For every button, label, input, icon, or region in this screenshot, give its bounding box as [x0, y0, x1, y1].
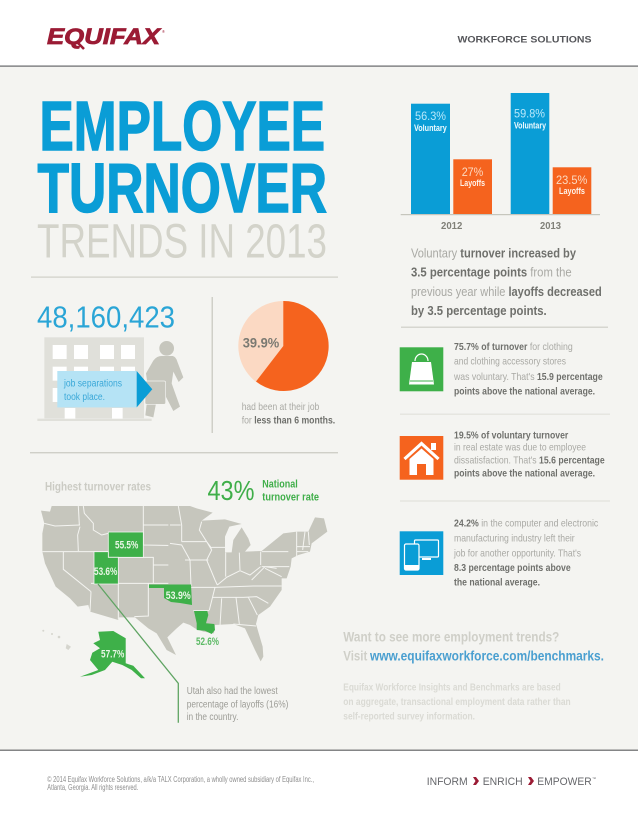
icon: person walking with briefcase — [145, 341, 183, 417]
call to action: Want to see more employment trends? — [343, 629, 559, 645]
state: Wyoming — [108, 532, 143, 557]
methodology note: self-reported survey information. — [343, 711, 475, 722]
header: Equifax logo: EQUIFAX — [47, 24, 162, 49]
callout: job separations took place: took place. — [64, 392, 105, 403]
footer: tagline: ENRICH — [483, 776, 523, 788]
footer: copyright — [47, 775, 314, 792]
map: highest turnover rates by US state — [41, 506, 327, 723]
bar chart: voluntary vs layoffs — [401, 93, 600, 232]
national turnover rate — [208, 475, 319, 506]
item: clothing stores — [400, 341, 603, 398]
methodology note: on aggregate, transactional employment data rather than — [343, 697, 571, 708]
national turnover rate: turnover rate — [262, 492, 319, 504]
text: computer manufacturing: job for another opportunity. That's — [453, 548, 581, 560]
text: real estate — [454, 429, 605, 480]
state labels: 55.5% — [115, 539, 138, 551]
callout text: Utah — [187, 686, 288, 723]
national turnover rate: National — [262, 478, 298, 490]
footer: tagline: INFORM — [427, 776, 468, 788]
callout text: Utah: Utah also had the lowest — [187, 686, 278, 697]
bar chart: voluntary vs layoffs: Voluntary — [414, 123, 447, 134]
callout line: Utah — [98, 584, 178, 723]
state: Alaska — [80, 631, 145, 678]
heading: highest turnover rates: Highest turnover rates — [45, 480, 151, 494]
pie caption: for less than 6 months. — [242, 414, 335, 426]
state labels: 53.9% — [166, 590, 191, 602]
callout text: Utah: percentage of layoffs (16%) — [187, 699, 288, 710]
text: computer manufacturing: the national average. — [454, 577, 540, 589]
pie chart: less than 6 months: 39.9% — [243, 335, 280, 351]
pie caption: had been at their job — [242, 401, 319, 413]
callout: job separations took place: job separations — [63, 379, 122, 390]
text: real estate: dissatisfaction. That's 15.6 percentage — [454, 454, 605, 466]
item: real estate — [400, 429, 605, 480]
bar chart: voluntary vs layoffs: Layoffs — [559, 186, 585, 197]
state labels — [94, 539, 219, 661]
text: clothing stores: was voluntary. That's 15.9 percentage — [453, 371, 603, 383]
bar chart: voluntary vs layoffs: 27% — [462, 165, 484, 179]
bar chart: voluntary vs layoffs: Layoffs — [460, 178, 485, 189]
text: chart summary: previous year while layoffs decreased — [411, 285, 602, 299]
map: western states — [41, 506, 177, 655]
title: EMPLOYEE — [40, 87, 325, 165]
state: Louisiana — [194, 611, 215, 634]
call to action — [343, 629, 604, 664]
map: eastern states — [168, 506, 327, 661]
title — [37, 87, 327, 268]
bar chart: voluntary vs layoffs: 2013 — [540, 221, 561, 232]
state: Oklahoma — [149, 584, 192, 605]
text: computer manufacturing — [453, 518, 598, 589]
header: Equifax logo: ® — [162, 29, 165, 34]
footer: copyright: Atlanta, Georgia. All rights reserved. — [47, 783, 138, 792]
bar chart: voluntary vs layoffs: 2012 — [441, 221, 463, 232]
footer: tagline: ™ — [592, 776, 596, 781]
bar chart: voluntary vs layoffs: 23.5% — [556, 173, 588, 187]
text: real estate: 19.5% of voluntary turnover — [454, 429, 568, 441]
state labels: 52.6% — [196, 636, 219, 648]
title: TRENDS IN 2013 — [37, 214, 327, 268]
bar chart: voluntary vs layoffs: 59.8% — [514, 107, 545, 121]
text: computer manufacturing: 8.3 percentage points above — [454, 562, 571, 574]
callout: job separations took place — [57, 371, 152, 407]
call to action: Visit — [343, 648, 368, 664]
title: TURNOVER — [38, 149, 327, 227]
text: clothing stores: and clothing accessory stores — [454, 356, 566, 368]
footer: tagline: EMPOWER — [537, 776, 592, 788]
text: chart summary: Voluntary turnover increased by — [411, 246, 576, 260]
footer: tagline — [427, 776, 596, 788]
pie chart: less than 6 months — [238, 301, 329, 391]
header: workforce solutions: WORKFORCE SOLUTIONS — [458, 34, 592, 46]
call to action: www.equifaxworkforce.com/benchmarks. — [369, 648, 604, 664]
state: Hawaii — [42, 630, 71, 650]
item: computer manufacturing — [400, 518, 598, 589]
text: computer manufacturing: 24.2% in the computer and electronic — [454, 518, 598, 530]
text: computer manufacturing: manufacturing industry left their — [454, 533, 575, 545]
bar chart: voluntary vs layoffs: Voluntary — [514, 120, 547, 131]
text: clothing stores: 75.7% of turnover for clothing — [454, 341, 573, 353]
text: clothing stores: points above the national average. — [454, 386, 595, 398]
bar chart: voluntary vs layoffs: 56.3% — [415, 109, 446, 123]
icon: phone and monitor — [400, 531, 443, 575]
icon: house — [400, 436, 443, 480]
panel: job separations — [37, 299, 183, 421]
state labels: 53.6% — [94, 566, 117, 578]
national turnover rate: 43% — [208, 475, 254, 506]
text: chart summary — [411, 246, 602, 318]
text: chart summary: 3.5 percentage points from the — [411, 266, 572, 280]
job separations number: 48,160,423 — [37, 299, 175, 334]
text: clothing stores — [453, 341, 603, 398]
callout text: Utah: in the country. — [187, 712, 238, 723]
icon: shopping bag — [400, 347, 443, 391]
text: chart summary: by 3.5 percentage points. — [411, 304, 547, 318]
methodology note — [343, 683, 571, 722]
icon: office building — [37, 337, 152, 421]
methodology note: Equifax Workforce Insights and Benchmarks are based — [343, 683, 561, 694]
footer: copyright: © 2014 Equifax Workforce Solutions, a/k/a TALX Corporation, a wholly owned subsidiary of Equifax Inc., — [47, 775, 314, 784]
state labels: 57.7% — [101, 649, 124, 661]
text: real estate: in real estate was due to employee — [454, 442, 586, 454]
pie caption — [242, 401, 335, 426]
text: real estate: points above the national average. — [454, 468, 595, 480]
state: Utah — [94, 552, 118, 584]
